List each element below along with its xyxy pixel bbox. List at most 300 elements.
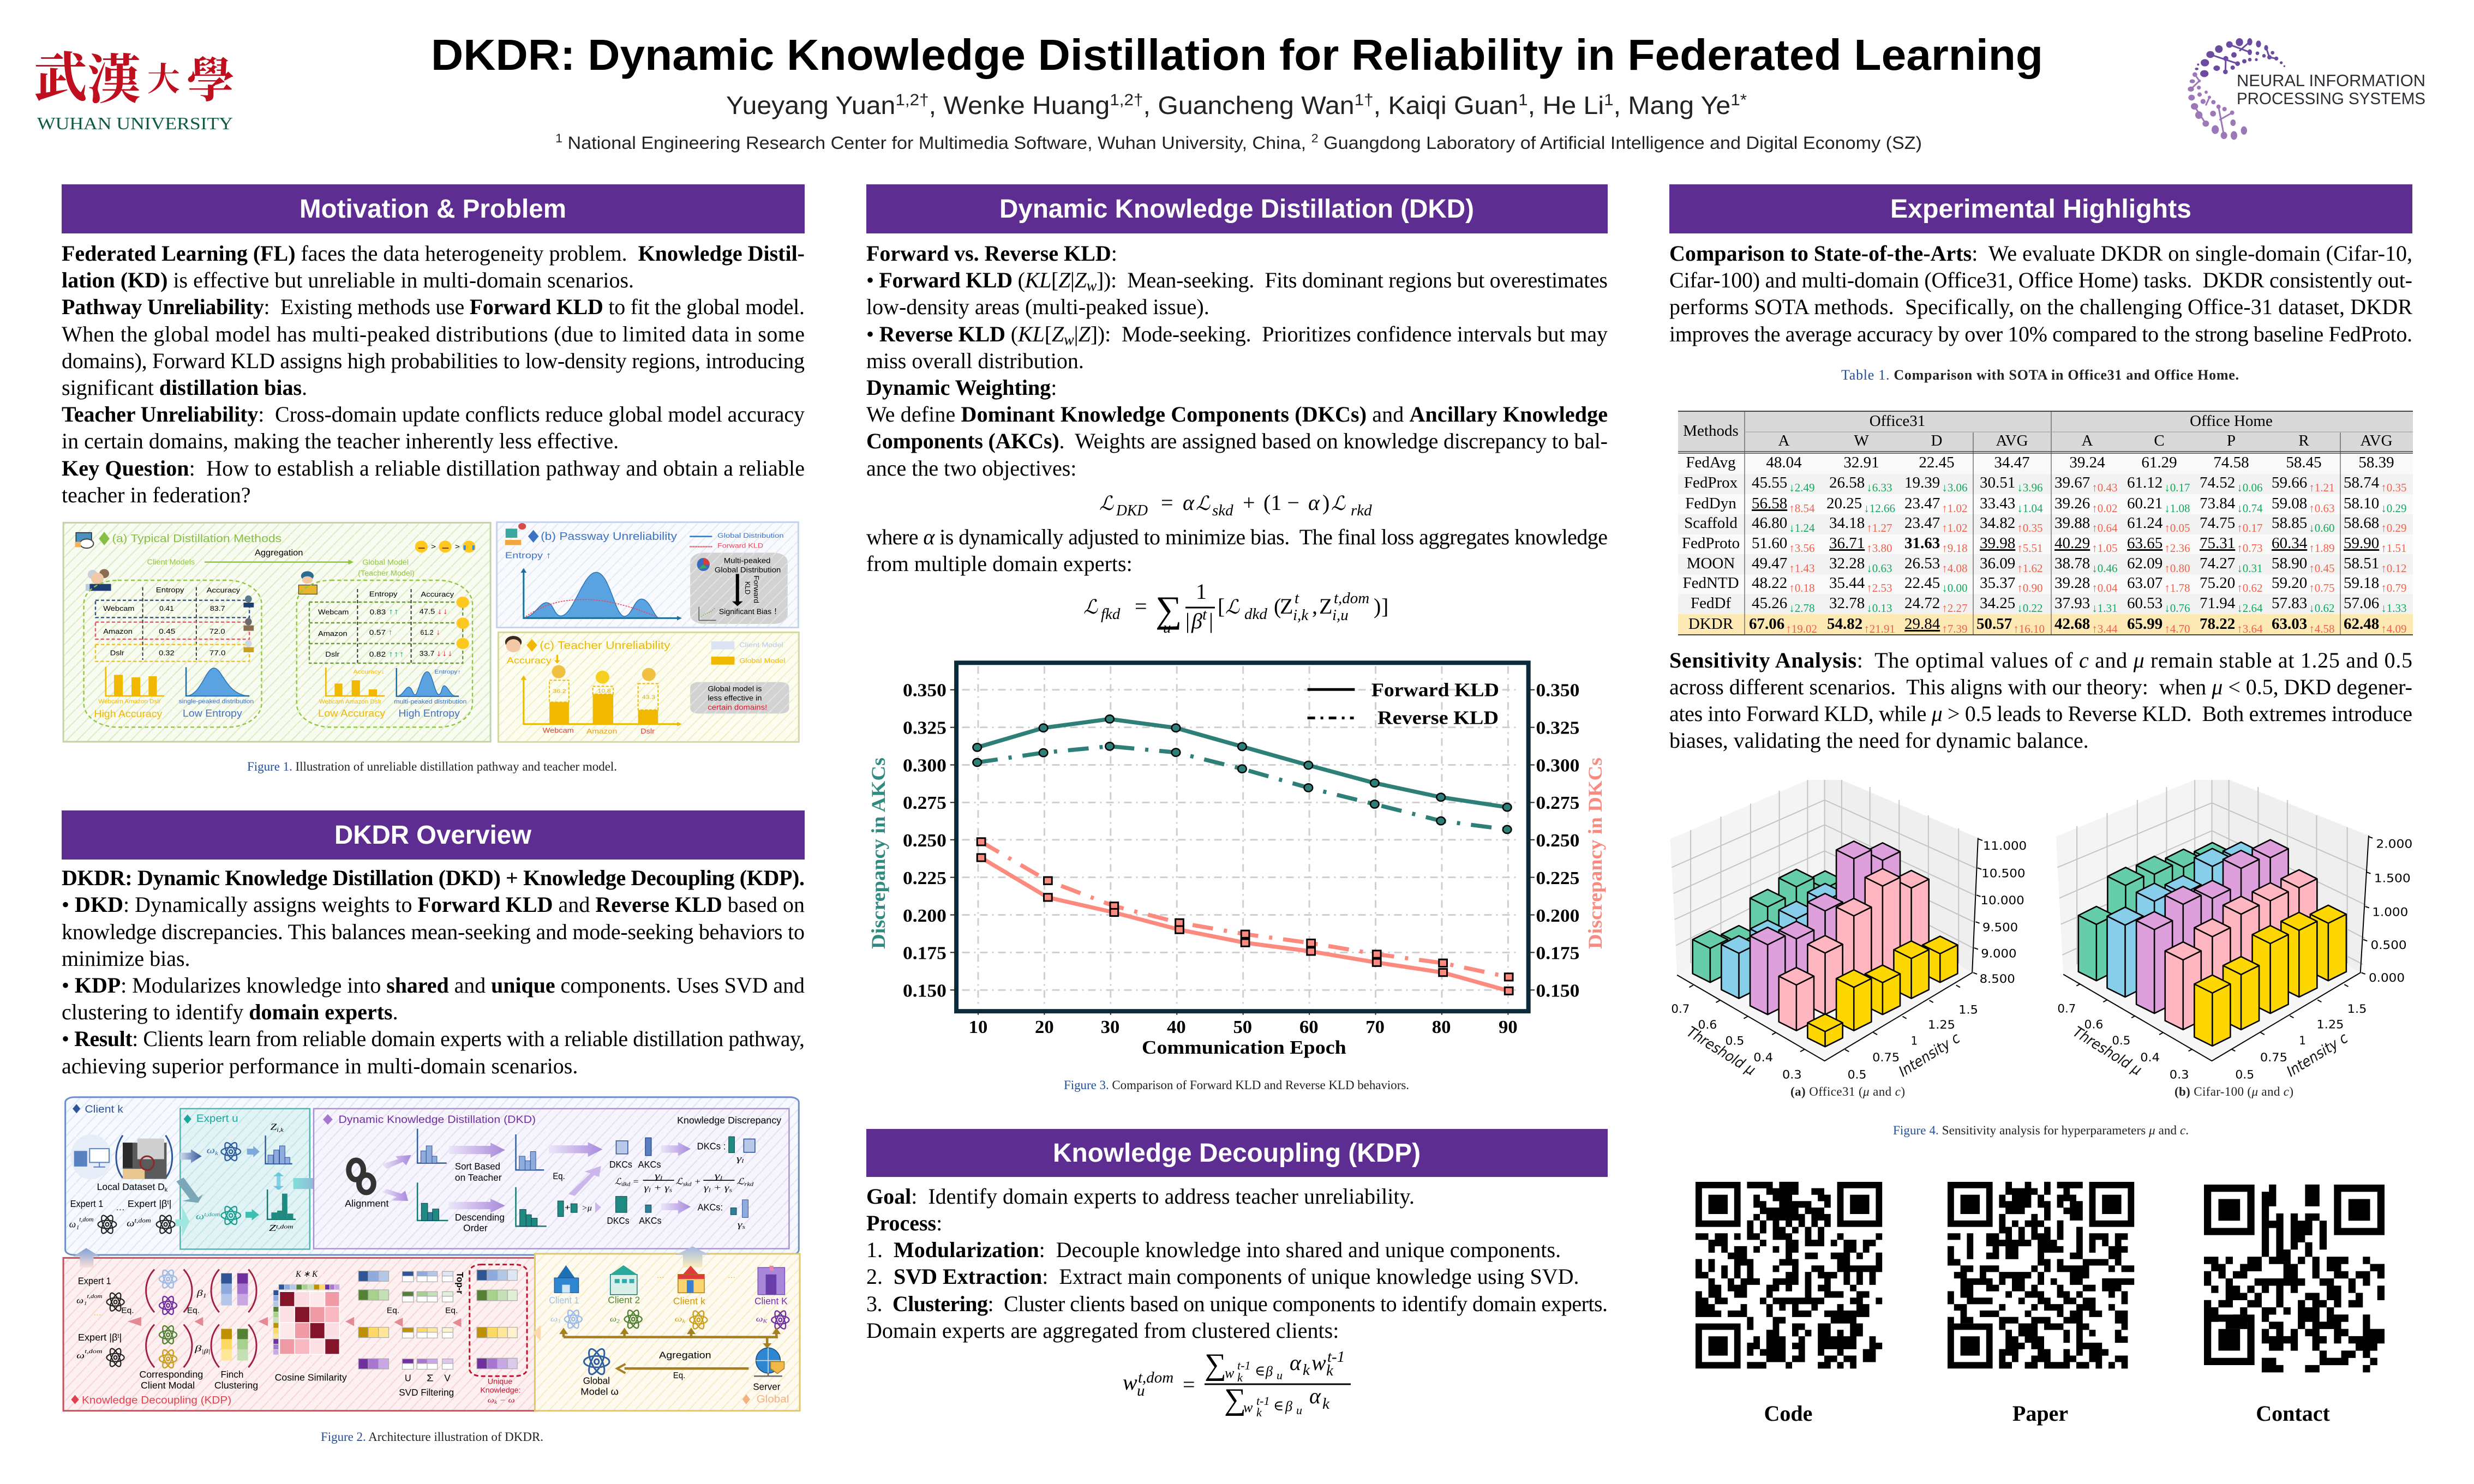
row DKDR: ↑16.10: [2013, 622, 2045, 635]
QR code: code: [1696, 1182, 1882, 1368]
panel: knowledge decoupling: t,dom: [85, 1348, 102, 1355]
row FedProto: 36.71: [1829, 534, 1865, 552]
text block: overview: • Result: Clients learn from reliable domain experts with a reliable distillation pathway,: [62, 1026, 805, 1051]
panel: global server: Model ω: [580, 1386, 619, 1397]
row FedProx: ↑0.35: [2381, 481, 2407, 494]
panel: dynamic knowledge distillation: l: [709, 1187, 711, 1193]
panel: dynamic knowledge distillation: rkd: [744, 1181, 754, 1187]
x axis tick labels: 90: [1499, 1017, 1518, 1037]
panel: knowledge decoupling: − ω: [497, 1396, 515, 1404]
3D chart (b) Cifar-100: 0.75: [2260, 1050, 2287, 1065]
text block: overview: • DKD: Dynamically assigns weights to Forward KLD and Reverse KLD based on: [62, 892, 805, 917]
text block: final loss: from multiple domain experts:: [866, 551, 1133, 576]
panel heading: Motivation & Problem: [62, 184, 805, 233]
row FedNTD: ↑2.53: [1866, 581, 1892, 594]
left axis tick labels: 0.225: [903, 868, 947, 888]
row FedProx: ↑0.43: [2092, 481, 2118, 494]
row FedAvg: 32.91: [1843, 454, 1879, 471]
text block: overview: [62, 866, 805, 1078]
QR code: contact: [2204, 1185, 2385, 1369]
panel: dynamic knowledge distillation: AKCs: [638, 1159, 661, 1170]
legend: [1308, 679, 1499, 728]
panel: (b) passway unreliability: Forward: [752, 575, 760, 603]
axis label: left: Discrepancy in AKCs: [867, 758, 889, 949]
panel: knowledge decoupling: k: [494, 1399, 498, 1405]
row FedProto: 63.65: [2127, 534, 2162, 552]
panel: client k: Local Dataset D: [97, 1181, 242, 1192]
equation: fkd loss: fkd: [1101, 605, 1121, 623]
row FedDyn: 39.26: [2054, 495, 2090, 512]
caption: figure 1: Figure 1. Illustration of unreliable distillation pathway and teacher model.: [247, 760, 617, 773]
panel heading: Dynamic Knowledge Distillation: Dynamic Knowledge Distillation (DKD): [999, 195, 1474, 224]
QR code: paper: [1948, 1182, 2134, 1368]
panel: knowledge decoupling: Eq.: [387, 1306, 399, 1315]
legend: Forward KLD: [1371, 679, 1499, 700]
row Scaffold: 74.75: [2200, 514, 2235, 532]
text block: forward vs reverse KLD: [866, 241, 1608, 480]
row FedDf: ↓2.78: [1789, 602, 1814, 615]
panel: dynamic knowledge distillation: l: [720, 1175, 722, 1181]
row FedProx: [1752, 474, 2407, 494]
equation: fkd loss: =: [1135, 594, 1147, 618]
panel: dynamic knowledge distillation: AKCs:: [698, 1202, 723, 1213]
row FedDyn: ↑0.02: [2092, 502, 2118, 515]
equation: fkd loss: u: [1163, 619, 1171, 636]
panel: dynamic knowledge distillation: Alignment: [345, 1198, 388, 1209]
panel: (a) typical distillation methods: Dslr: [110, 649, 124, 657]
row DKDR: ↑4.58: [2309, 622, 2335, 635]
panel: dynamic knowledge distillation: Sort Based: [455, 1161, 500, 1172]
text block: forward vs reverse KLD: • Forward KLD (KL[Z|Z: [866, 268, 1087, 292]
panel: client k: ω₁: [69, 1219, 91, 1230]
row FedAvg: [1766, 454, 2394, 471]
panel: dynamic knowledge distillation: s: [742, 1224, 745, 1230]
panel: knowledge decoupling: Cosine Similarity: [275, 1372, 347, 1383]
axis label: intensity c (a): Intensity c: [1896, 1030, 1963, 1080]
caption: figure 2: Figure 2. Architecture illustration of DKDR.: [321, 1430, 543, 1444]
panel: global server: K: [763, 1319, 768, 1324]
logo: NeurIPS: PROCESSING SYSTEMS: [2237, 89, 2425, 108]
text block: comparison to state-of-the-arts: performs SOTA methods. Specifically, on the challenging Office-31 dataset, DKDR: [1669, 295, 2412, 319]
panel: global server: Eq.: [673, 1371, 685, 1380]
x axis tick labels: 10: [969, 1017, 987, 1037]
text block: final loss: where α is dynamically adjusted to minimize bias. The final loss aggregates knowledge: [866, 525, 1608, 549]
row FedDyn: ↓12.66: [1864, 502, 1895, 515]
text block: motivation: significant distillation bias.: [62, 375, 307, 400]
panel: client k: t,dom: [134, 1217, 151, 1224]
panel: dynamic knowledge distillation: +: [565, 1203, 571, 1212]
panel: global server: Agregation: [659, 1350, 711, 1361]
panel: client k: Expert |β: [128, 1198, 209, 1209]
text block: sensitivity analysis: across different scenarios. This aligns with our theory: when μ < 0.5, DKD degener-: [1669, 675, 2412, 699]
3D chart (a) Office31: 0.7: [1671, 1002, 1690, 1016]
equation: fkd loss: ): [1374, 594, 1381, 618]
panel: expert u: Expert u: [196, 1113, 238, 1124]
panel: (a) typical distillation methods: Amazon: [103, 627, 133, 635]
equation: DKD loss: rkd: [1351, 502, 1372, 519]
row FedDf: ↓1.33: [2381, 602, 2407, 615]
row FedProto: ↑2.36: [2164, 542, 2190, 555]
left axis tick labels: 0.250: [903, 831, 947, 851]
panel: dynamic knowledge distillation: ℒ: [736, 1176, 750, 1186]
equation: expert aggregation: k: [1303, 1361, 1310, 1379]
row FedDyn: ↓1.04: [2017, 502, 2043, 515]
text block: comparison to state-of-the-arts: improves the average accuracy by over 10% compared to the strong baseline FedProto.: [1669, 322, 2412, 346]
figure 2: architecture of DKDR: [63, 1097, 800, 1444]
row MOON: 36.09: [1980, 555, 2015, 572]
panel: (a) typical distillation methods: single-peaked distribution: [179, 698, 254, 705]
panel: (a) typical distillation methods: Entropy↑: [434, 669, 461, 675]
equation: expert aggregation: w: [1123, 1370, 1137, 1395]
3D chart (a) Office31: 0.4: [1753, 1050, 1773, 1065]
panel: dynamic knowledge distillation: s: [669, 1187, 673, 1193]
row DKDR: ↑19.02: [1786, 622, 1817, 635]
panel: knowledge decoupling: t,dom: [87, 1293, 103, 1300]
row FedProx: 61.12: [2127, 474, 2162, 491]
3D chart (a) Office31: 0.6: [1698, 1018, 1717, 1032]
left axis tick labels: 0.175: [903, 943, 947, 964]
panel: expert u: Z: [269, 1223, 280, 1233]
logo: Wuhan University: WUHAN UNIVERSITY: [37, 113, 233, 133]
equation: fkd loss: ]: [1381, 594, 1388, 618]
panel: (a) typical distillation methods: ↑↑: [388, 607, 399, 616]
row FedProto: ↑1.89: [2309, 542, 2335, 555]
authors: , He Li: [1528, 91, 1604, 119]
row FedProto: ↑1.05: [2092, 542, 2118, 555]
3D chart (a) Office31: 0.3: [1782, 1068, 1802, 1082]
panel: client k: t,dom: [79, 1216, 93, 1223]
row Scaffold: 34.82: [1980, 514, 2015, 532]
panel: dynamic knowledge distillation: =: [630, 1176, 639, 1186]
3D chart (a) Office31: 9.000: [1981, 946, 2016, 960]
left axis tick labels: 0.200: [903, 905, 947, 926]
row FedDyn: 23.47: [1904, 495, 1940, 512]
3D chart (b) Cifar-100: 0.3: [2170, 1068, 2189, 1082]
authors: 1,2†: [1110, 91, 1143, 109]
panel: client k: ...: [116, 1204, 125, 1212]
equation: expert aggregation: k: [1326, 1362, 1334, 1379]
3D chart (a) Office31: 9.500: [1982, 921, 2018, 934]
row DKDR: 50.57: [1976, 615, 2012, 633]
panel: knowledge decoupling: t: [117, 1332, 119, 1339]
authors: 1: [1518, 91, 1528, 109]
row MOON: 26.53: [1904, 555, 1940, 572]
equation: fkd loss: t: [1295, 590, 1299, 607]
panel: expert u: i,k: [277, 1127, 284, 1133]
3D chart (b) Cifar-100: 1: [2299, 1034, 2306, 1047]
row FedDyn: 59.08: [2272, 495, 2307, 512]
table header: Office31: [1870, 412, 1925, 430]
panel: (b) passway unreliability: KLD: [744, 581, 751, 594]
text block: forward vs reverse KLD: ]): Mean-seeking. Fits dominant regions but overestimates: [1097, 268, 1608, 292]
3D chart (a) Office31: 1.5: [1958, 1003, 1978, 1017]
equation: fkd loss: |: [1185, 609, 1190, 633]
panel: knowledge decoupling: Finch: [220, 1369, 243, 1380]
equation: fkd loss: 1: [1196, 579, 1207, 604]
equation: fkd loss: ℒ: [1083, 596, 1098, 618]
panel: expert u: Z: [271, 1122, 281, 1132]
text block: forward vs reverse KLD: Forward vs. Reverse KLD:: [866, 241, 1117, 266]
axis label: threshold mu (b): Threshold μ: [2070, 1024, 2144, 1079]
row Scaffold: 58.68: [2344, 514, 2379, 532]
panel: (a) typical distillation methods: Webcam Amazon Dslr: [319, 698, 381, 705]
table header: R: [2298, 432, 2309, 449]
row Scaffold: 34.18: [1829, 514, 1865, 532]
row FedProto: ↑5.51: [2017, 542, 2042, 555]
line chart: forward vs reverse KLD discrepancy: [867, 663, 1606, 1092]
text block: motivation: teacher in federation?: [62, 483, 250, 507]
panel heading: DKDR Overview: DKDR Overview: [334, 821, 532, 850]
row FedProx: 26.58: [1829, 474, 1865, 491]
row MOON: ↑0.45: [2309, 562, 2335, 575]
panel: (a) typical distillation methods: Entropy: [369, 590, 398, 598]
panel: expert u: ω: [196, 1211, 209, 1222]
equation: fkd loss: (: [1274, 594, 1281, 618]
text block: final loss: [866, 525, 1608, 576]
row FedNTD: 35.44: [1829, 574, 1865, 592]
equation: DKD loss: (1 −: [1263, 490, 1305, 515]
panel: (a) typical distillation methods: Accuracy: [207, 586, 240, 594]
row FedAvg: 22.45: [1919, 454, 1955, 471]
text block: forward vs reverse KLD: Components (AKCs). Weights are assigned based on knowledge discrepancy to bal-: [866, 429, 1608, 453]
panel: (a) typical distillation methods: High Entropy: [398, 707, 460, 719]
row FedAvg: 61.29: [2141, 454, 2177, 471]
text block: sensitivity analysis: biases, validating the need for dynamic balance.: [1669, 728, 2089, 753]
row FedDyn: ↑8.54: [1789, 502, 1815, 515]
3D chart (a) Office31: 10.500: [1981, 867, 2026, 880]
equation: expert aggregation: k: [1237, 1371, 1243, 1384]
text block: overview: • KDP: Modularizes knowledge into shared and unique components. Uses SVD and: [62, 973, 805, 998]
panel: knowledge decoupling: |β|: [201, 1348, 211, 1355]
panel: dynamic knowledge distillation: γ: [715, 1170, 722, 1180]
3D chart (a) Office31: 1.25: [1928, 1018, 1955, 1032]
panel: (c) teacher unreliability: [498, 632, 799, 742]
row Scaffold: ↑0.17: [2237, 521, 2263, 534]
figure 4: 3D sensitivity bar charts: [1670, 773, 2412, 1137]
row FedNTD: ↑0.75: [2309, 581, 2335, 594]
row DKDR: 65.99: [2127, 615, 2162, 633]
equation: expert aggregation: w: [1311, 1350, 1326, 1375]
panel: client k: t: [167, 1199, 169, 1205]
equation: expert aggregation: =: [1183, 1372, 1195, 1397]
equation: expert aggregation: u: [1277, 1368, 1283, 1382]
panel: dynamic knowledge distillation: skd: [683, 1181, 692, 1187]
label: Code: Code: [1764, 1401, 1812, 1426]
panel: (a) typical distillation methods: (Teacher Model): [358, 569, 415, 578]
logo: Wuhan University: [34, 49, 235, 133]
row FedDyn: [1752, 495, 2407, 515]
equation: DKD loss: DKD: [1116, 502, 1148, 519]
row FedDf: 71.94: [2200, 594, 2235, 612]
3D chart (a) Office31: 0.5: [1848, 1068, 1866, 1082]
equation: fkd loss: ℒ: [1225, 596, 1240, 618]
x axis tick labels: 70: [1365, 1017, 1385, 1037]
panel: knowledge decoupling: 1: [203, 1293, 207, 1299]
equation: DKD loss: =: [1161, 490, 1173, 515]
panel: (c) teacher unreliability: Webcam: [543, 726, 574, 734]
panel heading: Experimental Highlights: [1669, 184, 2412, 233]
authors: 1,2†: [895, 91, 929, 109]
panel: knowledge decoupling: Client Modal: [141, 1380, 195, 1391]
panel: expert u: t,dom: [276, 1224, 293, 1230]
table method names: FedDyn: [1685, 495, 1736, 512]
row FedProto: ↑0.73: [2237, 542, 2263, 555]
panel: knowledge decoupling: U: [405, 1373, 411, 1384]
label: Paper: Paper: [2012, 1401, 2068, 1426]
equation: DKD loss: +: [1243, 490, 1255, 515]
equation: fkd loss: [: [1218, 594, 1225, 618]
panel: dynamic knowledge distillation: Eq.: [553, 1171, 565, 1181]
row Scaffold: 46.80: [1752, 514, 1787, 532]
panel: knowledge decoupling: Corresponding: [139, 1369, 203, 1380]
row FedProx: ↑1.21: [2309, 481, 2335, 494]
row FedProx: ↓3.96: [2017, 481, 2042, 494]
3D chart (b) Cifar-100: 0.6: [2084, 1018, 2103, 1031]
3D chart (a) Office31: [1670, 773, 2027, 1082]
text block: knowledge decoupling: 2. SVD Extraction: Extract main components of unique knowledge using SVD.: [866, 1264, 1579, 1289]
row FedProto: ↑3.56: [1789, 542, 1814, 555]
row MOON: ↑0.80: [2164, 562, 2190, 575]
affiliations: 1: [555, 131, 562, 145]
text block: sensitivity analysis: Sensitivity Analysis: The optimal values of c and μ remain stable at 1.25 and 0.5: [1669, 648, 2412, 672]
row FedDyn: 56.58: [1752, 495, 1787, 512]
equation: expert aggregation: β: [1285, 1398, 1292, 1414]
label: Contact: Contact: [2256, 1401, 2330, 1426]
panel: knowledge decoupling: Knowledge Decoupling (KDP): [82, 1394, 231, 1406]
equation: fkd loss: Z: [1319, 594, 1332, 618]
panel: dynamic knowledge distillation: dkd: [621, 1181, 631, 1187]
row FedDf: ↓1.31: [2092, 602, 2118, 615]
equation: expert aggregation: k: [1256, 1405, 1262, 1419]
row FedProx: ↓0.17: [2164, 481, 2190, 494]
panel: global server: ω: [610, 1315, 621, 1324]
left axis tick labels: 0.325: [903, 718, 947, 738]
caption: figure 3: Figure 3. Comparison of Forward KLD and Reverse KLD behaviors.: [1064, 1078, 1409, 1092]
panel: (a) typical distillation methods: 0.41: [159, 604, 174, 612]
panel: client k: [65, 1097, 799, 1255]
panel: (a) typical distillation methods: Global Model: [362, 558, 409, 567]
row Scaffold: ↓1.24: [1789, 521, 1815, 534]
row FedNTD: ↑0.90: [2017, 581, 2042, 594]
equation: DKD loss: ℒ: [1196, 492, 1211, 515]
row DKDR: ↑21.91: [1864, 622, 1895, 635]
row DKDR: ↑3.64: [2237, 622, 2263, 635]
row MOON: ↑1.62: [2017, 562, 2042, 575]
text block: knowledge decoupling: 3. Clustering: Cluster clients based on unique components to identify domain experts.: [866, 1291, 1608, 1316]
affiliations: Guangdong Laboratory of Artificial Intelligence and Digital Economy (SZ): [1319, 133, 1922, 153]
row FedNTD: 59.18: [2344, 574, 2379, 592]
3D chart (a) Office31: 11.000: [1983, 839, 2027, 852]
panel: dynamic knowledge distillation: ℒ: [615, 1176, 628, 1186]
equation: DKD loss: ℒ: [1331, 492, 1346, 515]
panel: knowledge decoupling: ...: [93, 1309, 101, 1317]
text block: overview: achieving superior performance in multi-domain scenarios.: [62, 1054, 578, 1078]
text block: motivation: Pathway Unreliability: Existing methods use Forward KLD to fit the global model.: [62, 295, 805, 319]
row FedDyn: 33.43: [1980, 495, 2015, 512]
panel: global server: 2: [616, 1319, 620, 1324]
authors: 1*: [1730, 91, 1747, 109]
panel: knowledge decoupling: Top-r: [454, 1272, 465, 1294]
panel: dynamic knowledge distillation: + γ: [711, 1183, 730, 1193]
panel: global server: ω: [756, 1315, 768, 1324]
panel: knowledge decoupling: Expert |β: [78, 1332, 160, 1343]
equation: DKD loss: ℒ: [1099, 492, 1114, 515]
table header: AVG: [2360, 432, 2393, 449]
equation: DKD loss: ): [1322, 490, 1329, 515]
table header: Methods: [1683, 422, 1739, 440]
row DKDR: ↑4.09: [2381, 622, 2407, 635]
panel: (a) typical distillation methods: 0.83: [370, 608, 386, 616]
caption: figure 4: Figure 4. Sensitivity analysis for hyperparameters μ and c.: [1893, 1123, 2189, 1137]
row FedProx: ↓6.33: [1866, 481, 1892, 494]
row FedProx: 19.39: [1904, 474, 1940, 491]
equation: fkd loss: Z: [1280, 594, 1293, 618]
3D chart (a) Office31: 1: [1911, 1034, 1918, 1048]
row FedProx: ↓2.49: [1789, 481, 1814, 494]
axis label: intensity c (b): Intensity c: [2284, 1030, 2351, 1080]
panel: global server: ...: [728, 1272, 735, 1279]
panel: dynamic knowledge distillation: γ: [704, 1183, 711, 1193]
row FedDf: ↓0.13: [1866, 602, 1892, 615]
row FedProto: ↑3.80: [1866, 542, 1892, 555]
panel: dynamic knowledge distillation: >μ: [582, 1204, 592, 1212]
row Scaffold: ↑0.05: [2164, 521, 2190, 534]
panel: (a) typical distillation methods: ↓↓: [437, 606, 448, 616]
series: teal forward KLD: [973, 715, 1511, 811]
row MOON: 58.90: [2272, 555, 2307, 572]
panel: dynamic knowledge distillation: γ: [644, 1183, 651, 1193]
row Scaffold: ↑1.27: [1866, 521, 1892, 534]
panel: knowledge decoupling: Knowledge:: [480, 1386, 520, 1395]
equation: fkd loss: i,k: [1293, 606, 1309, 624]
row Scaffold: 39.88: [2054, 514, 2090, 532]
row DKDR: 63.03: [2272, 615, 2307, 633]
affiliations: National Engineering Research Center for Multimedia Software, Wuhan University, China,: [562, 133, 1311, 153]
text block: comparison to state-of-the-arts: Comparison to State-of-the-Arts: We evaluate DKDR on single-domain (Cifar-10,: [1669, 241, 2412, 266]
authors: 1: [1604, 91, 1614, 109]
panel: client k: Client k: [85, 1103, 124, 1115]
x axis tick labels: 40: [1167, 1017, 1186, 1037]
table header: D: [1931, 432, 1942, 449]
row FedProx: 58.74: [2344, 474, 2379, 491]
row FedDf: ↓2.64: [2237, 602, 2263, 615]
row Scaffold: 23.47: [1904, 514, 1940, 532]
panel: knowledge decoupling: Clustering: [214, 1380, 258, 1391]
row FedDyn: ↑1.02: [1942, 502, 1967, 515]
axis label: threshold mu (a): Threshold μ: [1684, 1024, 1758, 1079]
panel: dynamic knowledge distillation: γ: [738, 1219, 745, 1229]
equation: expert aggregation: ∑: [1205, 1348, 1226, 1381]
row FedProx: 45.55: [1752, 474, 1787, 491]
row FedProx: 30.51: [1980, 474, 2015, 491]
row FedDyn: 20.25: [1826, 495, 1862, 512]
table method names: FedProto: [1682, 534, 1740, 552]
series: salmon reverse KLD: [977, 838, 1513, 981]
row FedNTD: 22.45: [1904, 574, 1940, 592]
table header: A: [1778, 432, 1790, 449]
equation: fkd loss: ∑: [1155, 588, 1182, 630]
text block: forward vs reverse KLD: miss overall distribution.: [866, 349, 1084, 373]
row FedAvg: 48.04: [1766, 454, 1802, 471]
3D chart (b) Cifar-100: 0.5: [2112, 1034, 2130, 1047]
text block: knowledge decoupling: 1. Modularization: Decouple knowledge into shared and unique components.: [866, 1237, 1561, 1262]
row FedDf: 24.72: [1904, 594, 1940, 612]
equation: DKD loss: [1099, 490, 1372, 519]
panel: dynamic knowledge distillation: s: [729, 1187, 732, 1193]
table header: AVG: [1996, 432, 2028, 449]
table method names: FedNTD: [1682, 574, 1739, 592]
row Scaffold: 61.24: [2127, 514, 2162, 532]
